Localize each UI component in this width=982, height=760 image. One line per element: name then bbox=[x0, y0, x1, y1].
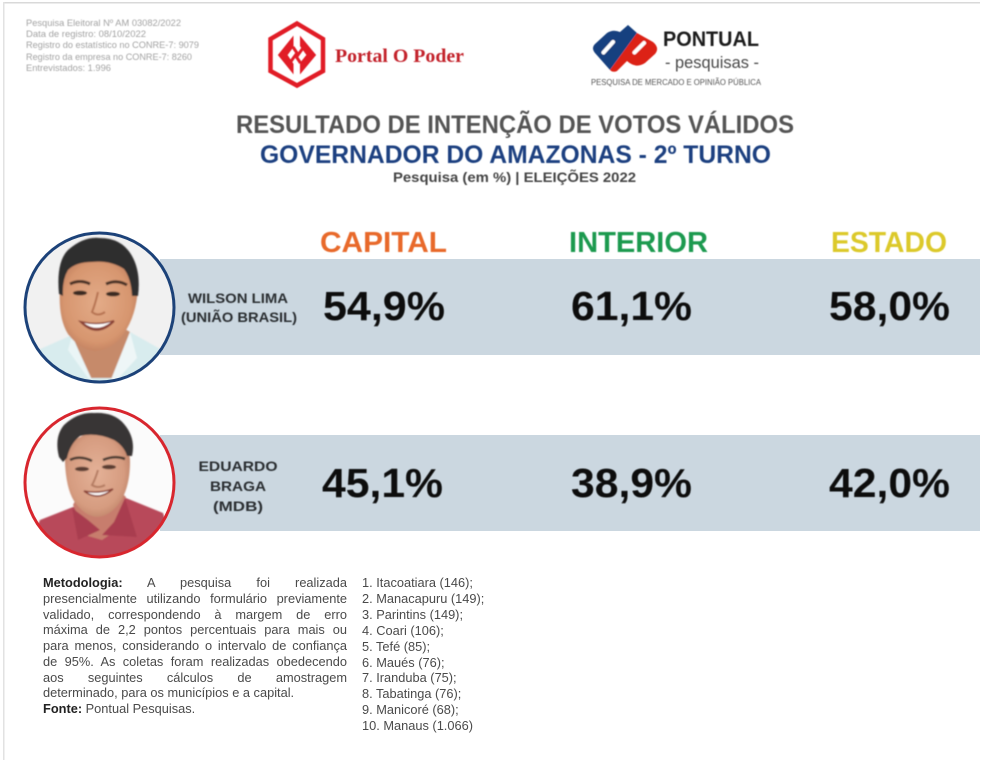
municipalities list: 2. Manacapuru (149); bbox=[362, 591, 484, 606]
result bar bbox=[160, 259, 980, 355]
municipalities list: 4. Coari (106); bbox=[362, 623, 444, 638]
percentages bbox=[322, 460, 950, 506]
wordmark: PONTUAL bbox=[663, 28, 759, 51]
registration info: Pesquisa Eleitoral Nº AM 03082/2022 bbox=[26, 18, 181, 28]
municipalities list: 9. Manicoré (68); bbox=[362, 702, 459, 717]
candidate name: BRAGA bbox=[210, 478, 266, 494]
methodology text: de 95%. As coletas foram realizadas obedecendo bbox=[43, 654, 347, 669]
title block: GOVERNADOR DO AMAZONAS - 2º TURNO bbox=[260, 141, 771, 169]
percentages bbox=[323, 283, 950, 329]
icon: blue and red mark bbox=[593, 25, 657, 72]
municipalities list: 3. Parintins (149); bbox=[362, 607, 463, 622]
column headers bbox=[320, 227, 947, 259]
municipalities list: 10. Manaus (1.066) bbox=[362, 718, 473, 733]
column headers: INTERIOR bbox=[569, 227, 708, 259]
methodology text: máxima de 2,2 pontos percentuais para mais ou bbox=[43, 622, 347, 637]
methodology text: aos seguintes cálculos de amostragem bbox=[43, 670, 347, 684]
registration info: Data de registro: 08/10/2022 bbox=[26, 29, 146, 39]
logo: Portal O Poder bbox=[270, 24, 465, 86]
result bar bbox=[160, 435, 980, 531]
candidate name: EDUARDO bbox=[198, 458, 278, 474]
title block: RESULTADO DE INTENÇÃO DE VOTOS VÁLIDOS bbox=[236, 109, 794, 139]
candidate name: (UNIÃO BRASIL) bbox=[181, 308, 297, 325]
municipalities list: 5. Tefé (85); bbox=[362, 639, 430, 654]
methodology text: Metodologia: A pesquisa foi realizada bbox=[43, 575, 347, 590]
methodology text: validado, correspondendo à margem de erro bbox=[43, 606, 347, 622]
title block bbox=[236, 109, 794, 185]
municipalities list bbox=[362, 575, 484, 733]
percentages: 61,1% bbox=[571, 283, 692, 329]
methodology text: presencialmente utilizando formulário previamente bbox=[43, 591, 347, 606]
portrait: Wilson Lima bbox=[25, 233, 175, 385]
registration info bbox=[26, 18, 199, 73]
column headers: CAPITAL bbox=[320, 227, 447, 259]
methodology text bbox=[43, 575, 347, 716]
icon: red hexagon bbox=[270, 24, 323, 86]
logo: Pontual Pesquisas bbox=[591, 25, 762, 87]
percentages: 54,9% bbox=[323, 283, 445, 329]
registration info: Entrevistados: 1.996 bbox=[26, 63, 111, 73]
wordmark: Portal O Poder bbox=[335, 46, 465, 67]
column headers: ESTADO bbox=[831, 227, 947, 259]
logo: Pontual Pesquisas: PESQUISA DE MERCADO E OPINIÃO PÚBLICA bbox=[591, 78, 762, 87]
row: Wilson Lima bbox=[25, 233, 980, 385]
methodology text: para menos, considerando o intervalo de confiança bbox=[43, 638, 347, 653]
methodology text: determinado, para os municípios e a capital. bbox=[43, 685, 294, 700]
percentages: 58,0% bbox=[829, 283, 950, 329]
municipalities list: 7. Iranduba (75); bbox=[362, 670, 457, 685]
registration info: Registro do estatístico no CONRE-7: 9079 bbox=[26, 40, 199, 50]
candidate name: (MDB) bbox=[213, 498, 263, 514]
registration info: Registro da empresa no CONRE-7: 8260 bbox=[26, 52, 192, 62]
title block: Pesquisa (em %) | ELEIÇÕES 2022 bbox=[393, 168, 636, 185]
percentages: 38,9% bbox=[571, 460, 692, 506]
percentages: 45,1% bbox=[322, 460, 443, 506]
candidate name bbox=[181, 290, 297, 325]
logo: Pontual Pesquisas: - pesquisas - bbox=[665, 53, 759, 72]
municipalities list: 1. Itacoatiara (146); bbox=[362, 575, 473, 590]
candidate name bbox=[198, 458, 278, 514]
candidate name: WILSON LIMA bbox=[188, 290, 288, 306]
row: Eduardo Braga bbox=[22, 408, 980, 560]
municipalities list: 6. Maués (76); bbox=[362, 655, 445, 670]
percentages: 42,0% bbox=[829, 460, 950, 506]
portrait: Eduardo Braga bbox=[22, 408, 178, 560]
methodology text: Fonte: Pontual Pesquisas. bbox=[43, 701, 195, 716]
municipalities list: 8. Tabatinga (76); bbox=[362, 686, 461, 701]
